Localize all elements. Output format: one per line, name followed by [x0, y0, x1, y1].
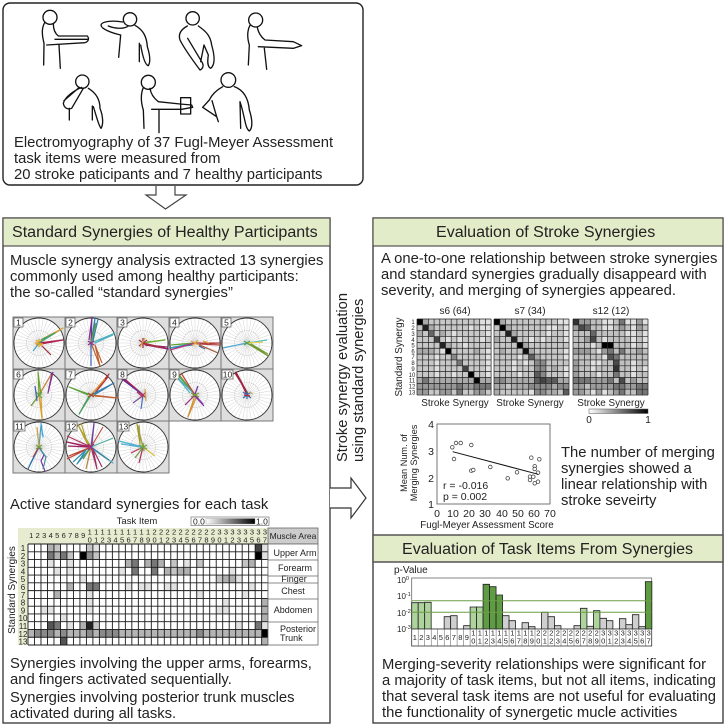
legend: activation colour scale — [191, 516, 269, 526]
table: muscle area column: Chest — [281, 586, 305, 596]
text: task item conclusions: that several task items are not useful for evaluating — [382, 689, 716, 705]
row labels: matrix: 13 — [409, 390, 416, 396]
heading: standard synergies: Standard Synergies of Healthy Participants — [12, 223, 318, 241]
arrow: to right panel — [330, 478, 366, 518]
chart: polar plots of 13 standard synergies — [13, 317, 273, 473]
row labels: synergy numbers: 7 — [21, 591, 26, 600]
header: task item numbers: 0123456789012345678901234567 — [88, 536, 267, 544]
text: synergy activation findings: and fingers activated sequentially. — [10, 672, 232, 688]
text: synergy activation findings: activated during all tasks. — [10, 706, 176, 722]
row labels: matrix: 9 — [411, 367, 415, 373]
arrow: down to standard synergies — [146, 186, 186, 209]
text: active standard synergies heading: Active standard synergies for each task — [10, 497, 269, 513]
matrix: s6: Stroke Synergy — [421, 398, 489, 409]
labels: synergy numbers: 10 — [223, 370, 232, 380]
table: task item numbers: 1111111111222222222233333333 — [471, 628, 651, 638]
axis ticks: y: 3 — [428, 446, 434, 458]
panel: data collection — [3, 3, 363, 185]
text: merging linear relationship: The number of merging — [561, 445, 715, 461]
row labels: synergy numbers: 9 — [21, 606, 26, 616]
header: task item numbers — [18, 528, 268, 544]
axis ticks: x: 60 — [528, 508, 540, 520]
panel: standard synergies of healthy participants — [3, 218, 330, 723]
label: standard synergies axis: Standard Synergies — [7, 546, 18, 634]
row labels: matrix: 5 — [411, 344, 415, 350]
labels: synergy numbers: 9 — [172, 370, 177, 380]
icons: seven body poses — [42, 10, 302, 133]
row labels: matrix: 12 — [409, 384, 416, 390]
text: task item conclusions: a majority of task items, but not all items, indicating — [382, 673, 716, 689]
axis ticks: x: 50 — [512, 508, 524, 520]
heading: evaluation of task items: Evaluation of Task Items From Synergies — [402, 540, 693, 558]
row labels: matrix: 7 — [411, 355, 415, 361]
chart: p-value bars per task item — [394, 565, 652, 646]
labels: synergy numbers: 5 — [224, 318, 229, 328]
text: synergy analysis description: Muscle synergy analysis extracted 13 synergies — [10, 253, 323, 269]
matrix: s7 — [494, 306, 569, 409]
axis ticks: x: 40 — [496, 508, 508, 520]
text: synergy analysis description: commonly used among healthy participants: — [10, 269, 299, 285]
matrix: s12 — [573, 306, 648, 409]
table: muscle area column: Muscle Area — [270, 531, 317, 541]
row labels: synergy numbers: 2 — [21, 552, 26, 561]
axis ticks: 10 — [397, 576, 406, 585]
row labels: matrix: 3 — [411, 332, 415, 338]
text: merging linear relationship: linear relationship with — [561, 477, 707, 493]
row labels: matrix: 2 — [411, 326, 415, 332]
row labels: synergy numbers: 6 — [21, 583, 26, 592]
row labels: matrix: 10 — [409, 373, 416, 379]
text: one-to-one relationship description: and standard synergies gradually disappeard with — [381, 267, 707, 283]
axis ticks: -3 — [406, 625, 411, 631]
row labels: synergy numbers: 12 — [19, 630, 28, 639]
matrix: s12: s12 (12) — [593, 306, 629, 317]
axis ticks: x: 0 — [434, 508, 440, 520]
row labels: matrix: 8 — [411, 361, 415, 367]
legend: activation colour scale: 1.0 — [256, 516, 268, 526]
axis title: x: Fugl-Meyer Assessment Score — [420, 520, 554, 531]
header: task item numbers: 1111111111222222222233333333 — [88, 528, 267, 536]
header: task item numbers: 123456789 — [29, 531, 85, 540]
axis ticks: y: 2 — [428, 473, 434, 485]
axis ticks: 10 — [397, 609, 406, 618]
bars — [412, 582, 652, 629]
text: data collection description: 20 stroke paticipants and 7 healthy participants — [14, 167, 322, 183]
axis ticks: -2 — [406, 609, 411, 615]
axis title: y: Mean Num. of — [399, 434, 409, 492]
row labels: matrix: 1 — [411, 320, 415, 326]
text: data collection description: task items were measured from — [14, 151, 220, 167]
axis ticks: 10 — [397, 625, 406, 634]
table: task item numbers: 0123456789012345678901234567 — [471, 636, 651, 646]
matrix: s7: s7 (34) — [514, 306, 546, 317]
table: muscle area column: Abdomen — [274, 605, 312, 615]
legend: similarity colour bar — [586, 409, 651, 426]
matrix: s12: Stroke Synergy — [577, 398, 645, 409]
text: one-to-one relationship description: severity, and merging of synergies appeared. — [381, 283, 676, 299]
axis title: p-Value — [394, 565, 428, 576]
text: synergy activation findings: Synergies involving the upper arms, forearms, — [10, 656, 312, 672]
matrix: s7: Stroke Synergy — [496, 398, 564, 409]
labels: synergy numbers — [14, 318, 233, 432]
labels: synergy numbers: 1 — [16, 318, 21, 328]
axis ticks: x — [434, 508, 556, 520]
table: muscle area column: Trunk — [280, 633, 303, 643]
table: muscle area column: Upper Arm — [273, 548, 317, 558]
matrix: s6 — [417, 306, 491, 409]
matrix: s6: s6 (64) — [439, 306, 471, 317]
labels: synergy numbers: 4 — [172, 318, 177, 328]
label: standard synergy axis: Standard Synergy — [394, 317, 405, 397]
labels: synergy numbers: 2 — [68, 318, 73, 328]
row labels: synergy numbers: 8 — [21, 598, 26, 608]
text: synergy activation findings: Synergies involving posterior trunk muscles — [10, 690, 295, 706]
axis title: y: Merging Synergies — [409, 424, 419, 501]
legend: activation colour scale: 0.0 — [193, 516, 205, 526]
table: muscle area column: Forearm — [278, 563, 312, 573]
axis ticks: -1 — [406, 592, 411, 598]
text: data collection description: Electromyography of 37 Fugl-Meyer Assessment — [14, 135, 333, 151]
text: task item conclusions: Merging-severity relationships were significant for — [382, 657, 706, 673]
labels: synergy numbers: 11 — [15, 422, 24, 432]
traces: synergies 1 to 13 — [28, 317, 268, 471]
axis ticks: 10 — [397, 592, 406, 601]
row labels: synergy numbers: 13 — [19, 638, 28, 646]
text: task item conclusions: the functionality of synergetic mucle activities — [382, 705, 677, 721]
legend: similarity colour bar: 0 — [586, 415, 592, 426]
axis ticks: y: 1 — [428, 499, 434, 511]
labels: synergy numbers: 6 — [16, 370, 21, 380]
labels: synergy numbers: 7 — [68, 370, 73, 380]
heading: evaluation of task items — [373, 535, 723, 562]
label: task item: Task Item — [117, 516, 157, 527]
row labels: matrix: 6 — [411, 350, 415, 356]
row labels: matrix: 4 — [411, 338, 415, 344]
significance threshold lines — [412, 601, 652, 612]
labels: synergy numbers: 3 — [120, 318, 125, 328]
row labels: synergy numbers: 11 — [19, 622, 28, 631]
text: merging linear relationship: synergies showed a — [561, 461, 693, 477]
row labels: synergy numbers: 3 — [21, 560, 26, 568]
regression line — [453, 452, 538, 474]
row labels: synergy numbers: 10 — [19, 614, 28, 623]
text: one-to-one relationship description: A one-to-one relationship between stroke synergies — [381, 251, 717, 267]
row labels: synergy numbers: 4 — [21, 568, 26, 576]
data points — [450, 441, 541, 485]
table: muscle area column: Posterior — [280, 624, 316, 634]
statistics: p = 0.002 — [443, 491, 487, 503]
row labels: synergy numbers: 1 — [21, 544, 26, 553]
label: stroke synergy evaluation using standard synergies: using standard synergies — [351, 299, 367, 462]
axis ticks: x: 20 — [463, 508, 475, 520]
heading: standard synergies — [3, 218, 330, 246]
row labels: synergy numbers — [18, 544, 28, 646]
heading: evaluation of stroke synergies: Evaluation of Stroke Synergies — [436, 223, 655, 241]
heatmap cells — [28, 544, 268, 645]
chart: task item by synergy heatmap — [7, 516, 318, 646]
axis ticks: x: 30 — [479, 508, 491, 520]
legend: similarity colour bar: 1 — [645, 415, 651, 426]
axis ticks: x: 10 — [447, 508, 459, 520]
axis ticks: y — [428, 419, 434, 511]
axis ticks: y: 4 — [428, 419, 434, 431]
labels: synergy numbers: 8 — [120, 370, 125, 380]
axis ticks: x: 70 — [544, 508, 556, 520]
statistics: r = -0.016 — [443, 480, 488, 492]
row labels: matrix: 11 — [409, 378, 416, 384]
table: task item numbers: 123456789 — [413, 633, 469, 642]
labels: synergy numbers: 12 — [67, 422, 76, 432]
axis ticks — [397, 576, 411, 634]
chart: scatter of merging synergies vs Fugl-Meyer score — [399, 419, 556, 531]
table: muscle area column — [268, 528, 318, 645]
table: task item numbers — [412, 628, 652, 646]
row labels: synergy numbers: 5 — [21, 575, 26, 584]
labels: synergy numbers: 13 — [119, 422, 128, 432]
chart: similarity matrices — [394, 306, 651, 426]
heading: evaluation of stroke synergies — [373, 218, 723, 246]
panel: evaluation of stroke synergies — [373, 218, 723, 723]
text: synergy analysis description: the so-called “standard synergies” — [10, 285, 233, 301]
table: muscle area column: Finger — [281, 574, 307, 584]
text: merging linear relationship: stroke seveirty — [561, 493, 657, 509]
axis ticks: 0 — [406, 576, 409, 582]
label: stroke synergy evaluation using standard synergies: Stroke synergy evaluation — [335, 293, 351, 462]
